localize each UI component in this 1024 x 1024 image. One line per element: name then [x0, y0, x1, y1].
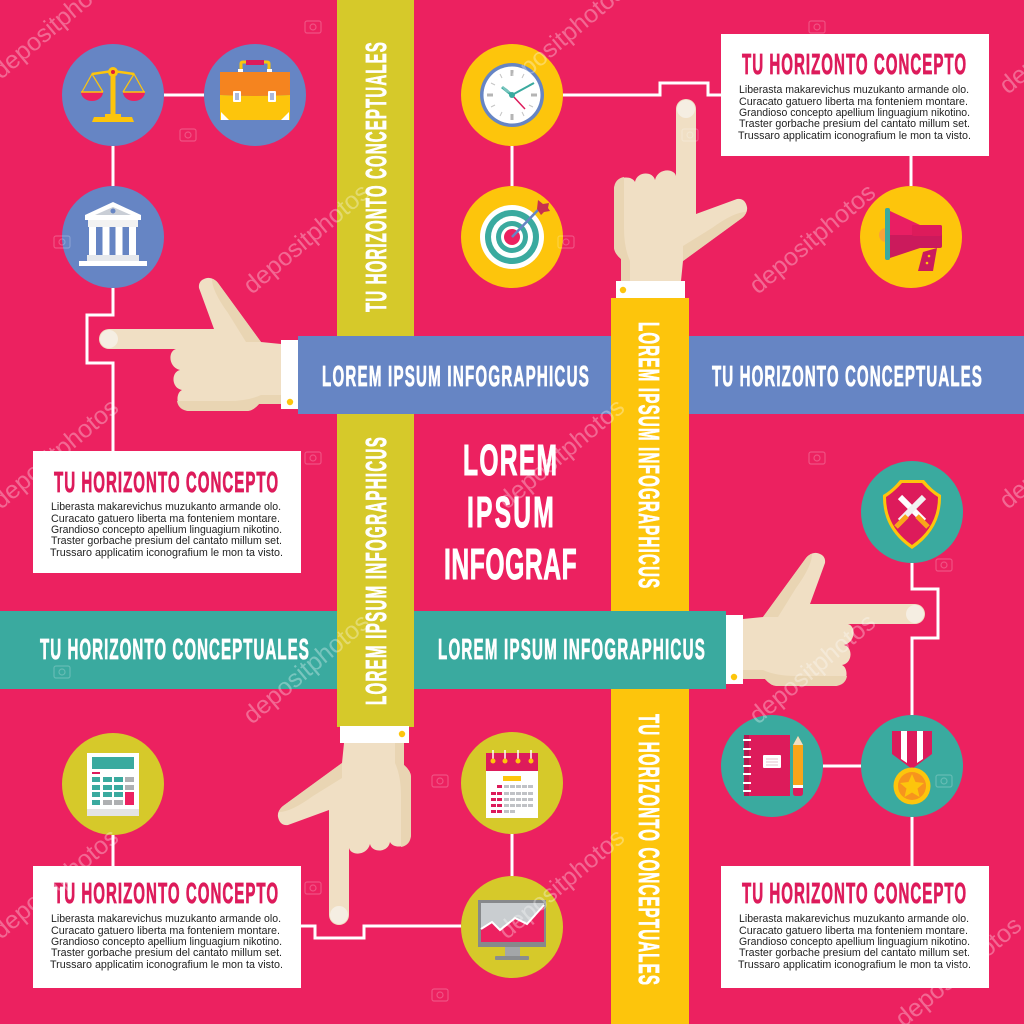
box body text: Trussaro applicatim iconografium le mon ta visto.: [738, 959, 971, 971]
box body text: Traster gorbache presium del cantato millum set.: [739, 947, 970, 959]
icon: megaphone: [860, 186, 962, 288]
panel: text box top right: [721, 34, 989, 156]
watermarks: depositphotos: [744, 178, 881, 300]
title: IPSUM: [467, 488, 554, 537]
box body text: Curacato gatuero liberta ma fonteniem montare.: [51, 925, 280, 937]
band: yellow vertical: TU HORIZONTO CONCEPTUALES: [633, 714, 665, 985]
band: teal horizontal: [0, 611, 726, 689]
box body text: [738, 84, 971, 142]
box body text: Grandioso concepto apellium linguagium nikotino.: [739, 107, 970, 119]
title: LOREM: [463, 436, 557, 485]
hand pointing up: [614, 99, 747, 298]
band: yellow vertical: LOREM IPSUM INFOGRAPHICUS: [633, 322, 665, 588]
icon: calendar: [461, 732, 563, 834]
icon: briefcase: [204, 44, 306, 146]
band: blue horizontal: [298, 336, 1024, 414]
band: olive vertical lower: [337, 414, 414, 727]
band: olive vertical upper: TU HORIZONTO CONCEPTUALES: [360, 42, 392, 312]
icon: scales: [62, 44, 164, 146]
watermarks: depositphotos: [238, 608, 375, 730]
box heading: TU HORIZONTO CONCEPTO: [742, 877, 966, 909]
band: olive vertical upper: [337, 0, 414, 340]
watermarks: depositphotos: [744, 608, 881, 730]
box body text: Grandioso concepto apellium linguagium nikotino.: [739, 936, 970, 948]
box body text: Grandioso concepto apellium linguagium nikotino.: [51, 524, 282, 536]
box body text: [738, 913, 971, 971]
box heading: TU HORIZONTO CONCEPTO: [742, 48, 966, 80]
box body text: Curacato gatuero liberta ma fonteniem montare.: [739, 925, 968, 937]
box body text: Curacato gatuero liberta ma fonteniem montare.: [51, 513, 280, 525]
box body text: Traster gorbache presium del cantato millum set.: [51, 535, 282, 547]
box body text: Trussaro applicatim iconografium le mon ta visto.: [50, 547, 283, 559]
box body text: Trussaro applicatim iconografium le mon ta visto.: [50, 959, 283, 971]
icon: notebook and pencil: [721, 715, 823, 817]
icon: clock: [461, 44, 563, 146]
hand pointing right: [726, 553, 925, 686]
connector lines: [87, 83, 938, 938]
box heading: TU HORIZONTO CONCEPTO: [54, 877, 278, 909]
panel: text box bottom left: [33, 866, 301, 988]
box body text: Grandioso concepto apellium linguagium nikotino.: [51, 936, 282, 948]
watermarks: depositphotos: [493, 823, 630, 945]
title: INFOGRAF: [444, 540, 577, 589]
icon: shield: [861, 461, 963, 563]
watermarks: depositphotos: [238, 178, 375, 300]
band: blue horizontal: LOREM IPSUM INFOGRAPHICUS: [322, 360, 589, 392]
band: olive vertical lower: LOREM IPSUM INFOGRAPHICUS: [360, 437, 392, 705]
box body text: Traster gorbache presium del cantato millum set.: [51, 947, 282, 959]
box body text: Liberasta makarevichus muzukanto armande olo.: [51, 501, 281, 513]
band: yellow vertical: [611, 298, 689, 1024]
box body text: Trussaro applicatim iconografium le mon ta visto.: [738, 130, 971, 142]
panel: text box middle left: [33, 451, 301, 573]
hand pointing left: [99, 278, 298, 411]
icon: calculator: [62, 733, 164, 835]
band: blue horizontal: TU HORIZONTO CONCEPTUALES: [712, 360, 982, 392]
box body text: Liberasta makarevichus muzukanto armande olo.: [51, 913, 281, 925]
band: teal horizontal: LOREM IPSUM INFOGRAPHICUS: [438, 633, 705, 665]
icon: monitor chart: [461, 876, 563, 978]
box body text: Liberasta makarevichus muzukanto armande olo.: [739, 84, 969, 96]
icon: target: [461, 186, 563, 288]
box body text: [50, 501, 283, 559]
icon: medal: [861, 715, 963, 817]
box body text: Curacato gatuero liberta ma fonteniem montare.: [739, 96, 968, 108]
panel: text box bottom right: [721, 866, 989, 988]
hand pointing down: [278, 726, 411, 925]
icon: bank: [62, 186, 164, 288]
box body text: [50, 913, 283, 971]
title: [444, 436, 577, 589]
box heading: TU HORIZONTO CONCEPTO: [54, 466, 278, 498]
watermarks: depositphotos: [493, 393, 630, 515]
band: teal horizontal: TU HORIZONTO CONCEPTUALES: [40, 633, 309, 665]
box body text: Liberasta makarevichus muzukanto armande olo.: [739, 913, 969, 925]
box body text: Traster gorbache presium del cantato millum set.: [739, 118, 970, 130]
